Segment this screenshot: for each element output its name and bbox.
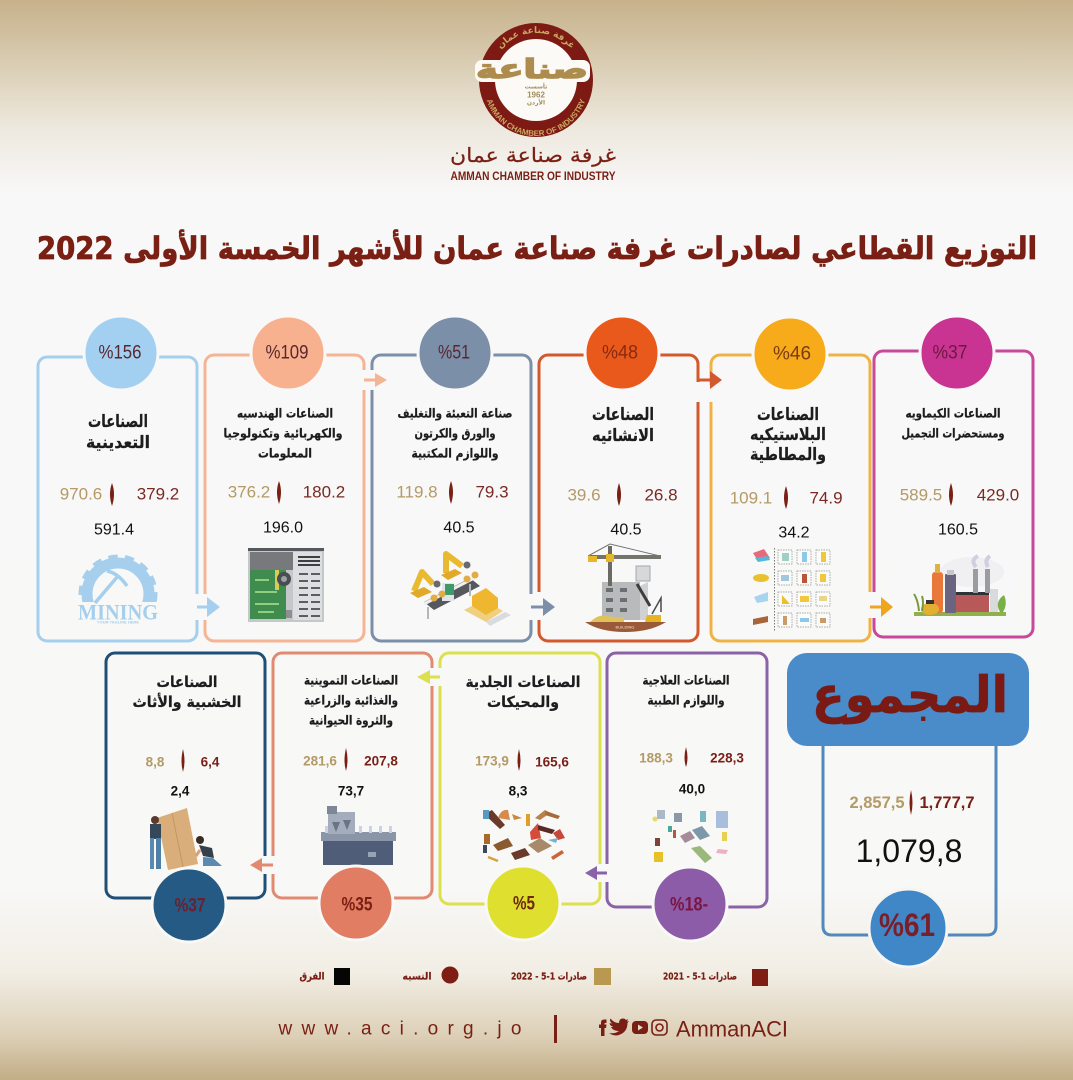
logo: Amman Chamber of Industry: غرفة صناعة عمان [450,143,616,167]
percentage circle [753,317,827,391]
icon: crane and building [585,544,666,632]
icon: robot arms conveyor [410,554,511,626]
figures: 1,777,7 [919,794,975,812]
panel title: والكهربائية وتكنولوجيا [224,426,342,440]
figures [228,481,345,536]
figures: 207,8 [364,754,398,768]
panel title: واللوازم المكتبية [412,446,498,462]
logo: Amman Chamber of Industry: غرفة صناعة عمان [500,26,574,49]
panel title: الصناعات [757,405,819,425]
panel title [86,412,150,453]
figures: 40.5 [610,522,642,538]
logo: Amman Chamber of Industry: الأردن [527,98,545,106]
icon: instagram [652,1020,667,1035]
panel title: والورق والكرتون [414,426,496,440]
figures: 379.2 [137,484,179,504]
panel title [224,406,342,460]
figures: 40.5 [443,520,475,536]
percentage circle: %37 [932,342,968,364]
panel title: والثروة الحيوانية [309,712,393,728]
panel title: ومستحضرات التجميل [902,426,1004,440]
percentage circle [84,316,158,390]
legend: exports 2022: صادرات 1-5 - 2022 [511,972,587,982]
total heading [787,653,1029,746]
figures: 2,4 [171,784,190,798]
percentage circle: %61 [879,907,935,943]
percentage circle: wood [152,868,226,942]
figures: 429.0 [977,486,1019,504]
figures: 26.8 [644,486,678,504]
figures: 6,4 [201,754,220,770]
legend: exports 2021: صادرات 1-5 - 2021 [663,972,737,982]
figures: 376.2 [228,482,270,502]
figures: 8,8 [146,754,165,770]
percentage circle [585,316,659,390]
figures: 34.2 [778,524,810,542]
percentage circle: leather: %5 [513,894,535,914]
figures: 165,6 [535,754,569,770]
panel: mining industries [38,316,199,641]
panel title [642,672,730,708]
percentage circle: wood: %37 [174,896,206,916]
panel title: البلاستيكيه [750,425,826,445]
panel: food and agriculture industries [271,653,434,898]
legend: difference [300,968,350,985]
figures [60,483,179,538]
panel: pharmaceutical industries [605,653,767,907]
figures: 188,3 [639,750,673,766]
figures: 1,079,8 [856,833,962,869]
logo: Amman Chamber of Industry: 1962 [527,90,545,100]
figures [849,790,975,869]
panel title: الصناعات الكيماويه [906,406,1000,420]
percentage circle [418,316,492,390]
legend: difference: الفرق [300,972,324,982]
icon: youtube [632,1021,648,1034]
icon: facebook [599,1020,606,1036]
figures: 39.6 [567,486,601,504]
icon: medical production [652,810,728,863]
figures [146,749,220,798]
footer website: www.aci.org.jo [278,1018,522,1040]
figures: 2,857,5 [849,794,905,812]
icon: computer case [248,548,324,622]
icon: cosmetics factory [914,556,1006,616]
panel title: الصناعات [592,405,654,425]
figures: 591.4 [94,522,134,538]
icon: leather workshop [483,810,565,861]
legend [300,966,768,986]
icon: crane and building: BUILDING [616,624,634,630]
logo: Amman Chamber of Industry: AMMAN CHAMBER OF INDUSTRY [486,98,585,136]
panel: total [787,653,1029,967]
percentage circle: %51 [438,342,470,364]
figures: 228,3 [710,750,744,766]
figures: 160.5 [938,522,978,538]
percentage circle: food: %35 [342,894,373,916]
figures: 589.5 [900,486,942,504]
figures: 8,3 [509,784,528,798]
icon: furniture movers [150,808,222,870]
percentage circle: %156 [98,342,142,364]
panel: leather and textile industries [438,653,602,904]
panel title: واللوازم الطبية [648,692,724,708]
percentage circle: %46 [773,344,811,364]
panel title: الانشائيه [592,426,654,446]
icon: mining gear [78,558,158,630]
logo: Amman Chamber of Industry: تأسست [525,82,547,90]
arrow: pharmaceutical to leather [585,866,607,880]
arrow: leather to food [417,670,440,684]
panel title: الخشبية والأثاث [132,693,242,711]
footer handle: AmmanACI [676,1016,788,1042]
legend: exports 2022 [511,968,611,985]
figures [303,748,398,798]
panel title: التعدينية [86,433,150,453]
percentage circle: pharmaceutical: %18- [670,894,708,916]
percentage circle: food [319,866,393,940]
logo: Amman Chamber of Industry: صناعة [476,55,588,85]
total heading: المجموع [812,666,1008,725]
panel title: والمطاطية [750,445,826,465]
panel title [398,406,512,462]
panel: packaging industries [370,316,533,641]
panel title: الصناعات التموينية [304,672,398,688]
icon: materials grid [753,548,830,631]
figures [567,483,678,538]
panel: plastics and rubber industries [709,317,872,641]
panel title: الصناعات الجلدية [466,673,580,691]
arrow: construction to plastics [697,371,722,389]
icon: twitter [609,1018,629,1035]
icon: bottling machine [321,806,396,865]
figures: 970.6 [60,484,102,504]
figures [475,749,569,798]
figures: 281,6 [303,754,337,768]
figures [639,747,744,796]
figures: 74.9 [809,488,843,508]
panel: wood and furniture industries [106,653,267,898]
panel title [592,405,654,446]
panel title [304,672,398,728]
panel: chemical and cosmetics industries [872,316,1033,637]
percentage circle: %109 [266,342,308,364]
legend: percentage [402,966,458,984]
percentage circle [251,316,325,390]
arrow: plastics to chemicals [870,597,893,617]
panel: engineering industries [203,316,366,641]
figures [900,483,1019,538]
panel title [466,673,580,711]
figures: 73,7 [338,784,364,798]
arrow: food to wood [250,858,273,872]
legend: exports 2021 [663,969,768,986]
panel title: الصناعات [156,673,218,691]
icon: mining gear: MINING [78,600,158,624]
percentage circle [869,889,947,967]
figures: 79.3 [475,482,509,502]
figures: 119.8 [396,482,438,502]
figures: 173,9 [475,754,509,768]
panel title: المعلومات [258,446,312,460]
logo: Amman Chamber of Industry: AMMAN CHAMBER OF INDUSTRY [450,169,616,183]
arrow: mining to engineering [197,597,220,617]
panel title: الصناعات العلاجية [642,672,730,688]
percentage circle [920,316,994,390]
panel title: صناعة التعبئة والتغليف [398,406,512,420]
percentage circle: %48 [602,342,638,364]
legend: percentage: النسبه [402,972,432,982]
panel title [902,406,1004,440]
figures: 40,0 [679,782,705,796]
panel title [132,673,242,711]
arrow: engineering to packaging [364,373,387,387]
panel title: والغذائية والزراعية [304,692,398,708]
panel: construction industries [537,316,700,641]
figures: 196.0 [263,520,303,536]
icon: mining gear: YOUR TAGLINE HERE [97,620,139,624]
footer divider [554,1015,557,1043]
percentage circle: pharmaceutical [653,867,727,941]
panel title: الصناعات [88,412,148,432]
panel title: الصناعات الهندسيه [237,406,333,420]
logo: Amman Chamber of Industry [450,23,616,183]
figures: 109.1 [730,488,772,508]
percentage circle: leather [486,866,560,940]
figures [396,481,509,536]
panel title: والمحيكات [487,693,559,711]
panel title [750,405,826,465]
figures: 180.2 [303,482,345,502]
figures [730,486,843,542]
arrow: packaging to construction [531,598,555,616]
social icons [599,1018,667,1036]
